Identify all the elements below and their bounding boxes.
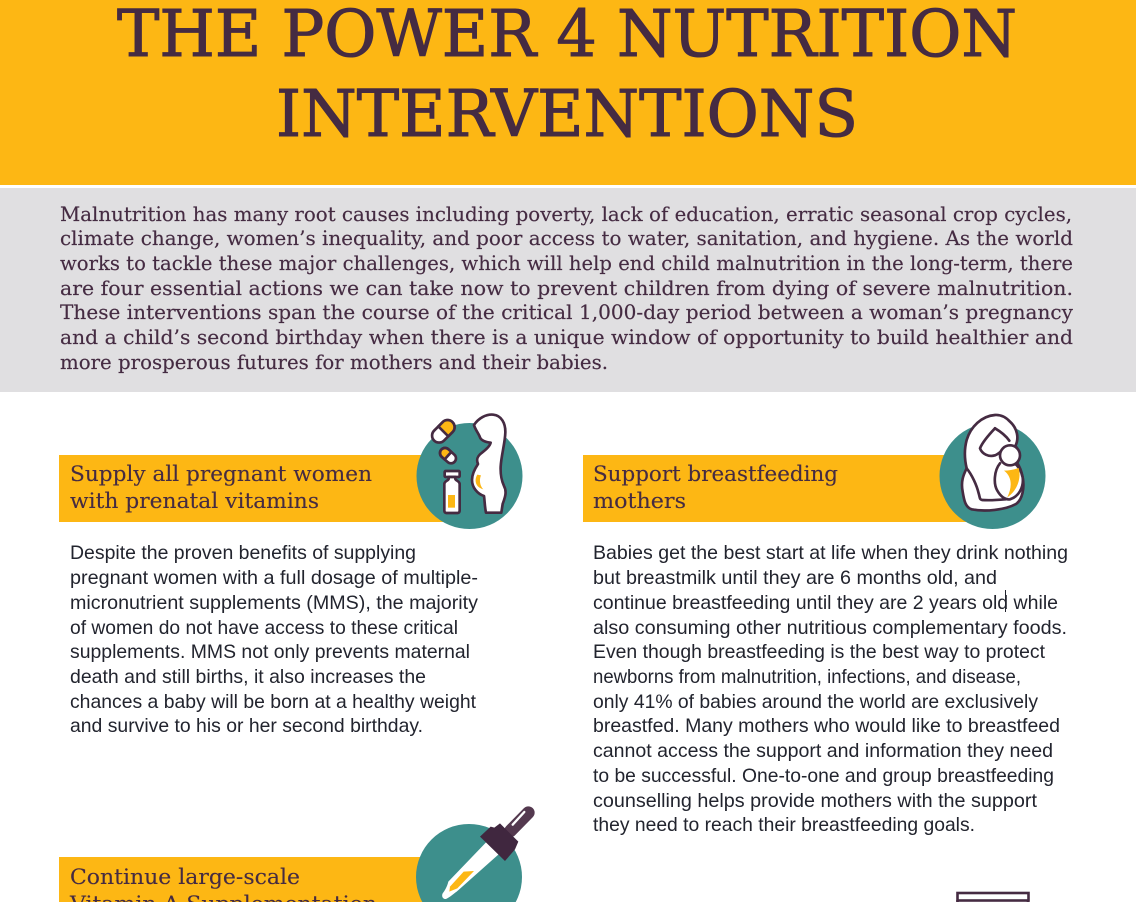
heading: vitamin A: Continue large-scale <box>70 865 300 890</box>
title <box>117 0 1017 152</box>
body text: prenatal vitamins: pregnant women with a full dosage of multiple- <box>70 567 478 589</box>
heading: breastfeeding: Support breastfeeding <box>593 462 838 487</box>
panel: introduction: are four essential actions we can take now to prevent children from dying of severe malnutrition. <box>60 277 1073 300</box>
heading: vitamin A <box>59 857 444 902</box>
icon: mother and baby <box>940 415 1046 529</box>
body text: prenatal vitamins: and survive to his or her second birthday. <box>70 715 423 737</box>
heading: prenatal vitamins: with prenatal vitamins <box>70 489 319 514</box>
heading: prenatal vitamins: Supply all pregnant women <box>70 462 372 487</box>
body text: breastfeeding: continue breastfeeding until they are 2 years old while <box>593 592 1058 614</box>
icon: pregnant woman with vitamins <box>416 415 522 529</box>
body text: breastfeeding: they need to reach their breastfeeding goals. <box>593 814 975 836</box>
panel: prenatal vitamins <box>59 415 522 737</box>
body text: breastfeeding: also consuming other nutritious complementary foods. <box>593 617 1067 639</box>
panel: introduction: works to tackle these major challenges, which will help end child malnutrition in the long-term, there <box>60 252 1073 275</box>
heading: breastfeeding: mothers <box>593 489 686 514</box>
body text: breastfeeding: to be successful. One-to-one and group breastfeeding <box>593 765 1054 787</box>
panel: vitamin A supplementation <box>59 812 528 902</box>
panel: introduction: Malnutrition has many root causes including poverty, lack of education, erratic seasonal crop cycles, <box>60 203 1072 226</box>
body text: breastfeeding: breastfed. Many mothers who would like to breastfeed <box>593 715 1060 737</box>
bottle <box>445 471 460 477</box>
body text: breastfeeding <box>593 542 1068 836</box>
panel: introduction: more prosperous futures for mothers and their babies. <box>60 351 608 374</box>
panel: introduction <box>0 188 1136 392</box>
body text: breastfeeding: only 41% of babies around the world are exclusively <box>593 691 1038 713</box>
body text: breastfeeding: Even though breastfeeding is the best way to protect <box>593 641 1046 663</box>
body text: breastfeeding: Babies get the best start at life when they drink nothing <box>593 542 1068 564</box>
body text: breastfeeding: newborns from malnutrition, infections, and disease, <box>593 666 1021 688</box>
body text: prenatal vitamins: Despite the proven benefits of supplying <box>70 542 416 564</box>
body text: breastfeeding: but breastmilk until they are 6 months old, and <box>593 567 997 589</box>
panel: introduction: climate change, women’s inequality, and poor access to water, sanitation, and hygiene. As the world <box>60 227 1073 250</box>
body text: prenatal vitamins: supplements. MMS not only prevents maternal <box>70 641 470 663</box>
panel: introduction: These interventions span the course of the critical 1,000-day period between a woman’s pregnancy <box>60 301 1073 324</box>
pills <box>429 417 457 445</box>
heading: breastfeeding <box>583 455 968 522</box>
body text: prenatal vitamins: micronutrient supplements (MMS), the majority <box>70 592 478 614</box>
body text: prenatal vitamins: chances a baby will be born at a healthy weight <box>70 691 477 713</box>
title banner <box>0 0 1136 185</box>
body text: breastfeeding: counselling helps provide mothers with the support <box>593 790 1038 812</box>
panel: introduction: and a child’s second birthday when there is a unique window of opportunity to build healthier and <box>60 326 1073 349</box>
heading: prenatal vitamins <box>59 455 444 522</box>
body text: prenatal vitamins: death and still births, it also increases the <box>70 666 426 688</box>
body text: breastfeeding: cannot access the support and information they need <box>593 740 1053 762</box>
body text: prenatal vitamins <box>70 542 478 737</box>
panel: breastfeeding <box>583 415 1068 836</box>
body text: prenatal vitamins: of women do not have access to these critical <box>70 617 458 639</box>
icon: partial fourth intervention icon <box>958 893 1028 902</box>
title: INTERVENTIONS <box>276 77 858 152</box>
icon: dropper <box>416 812 528 902</box>
